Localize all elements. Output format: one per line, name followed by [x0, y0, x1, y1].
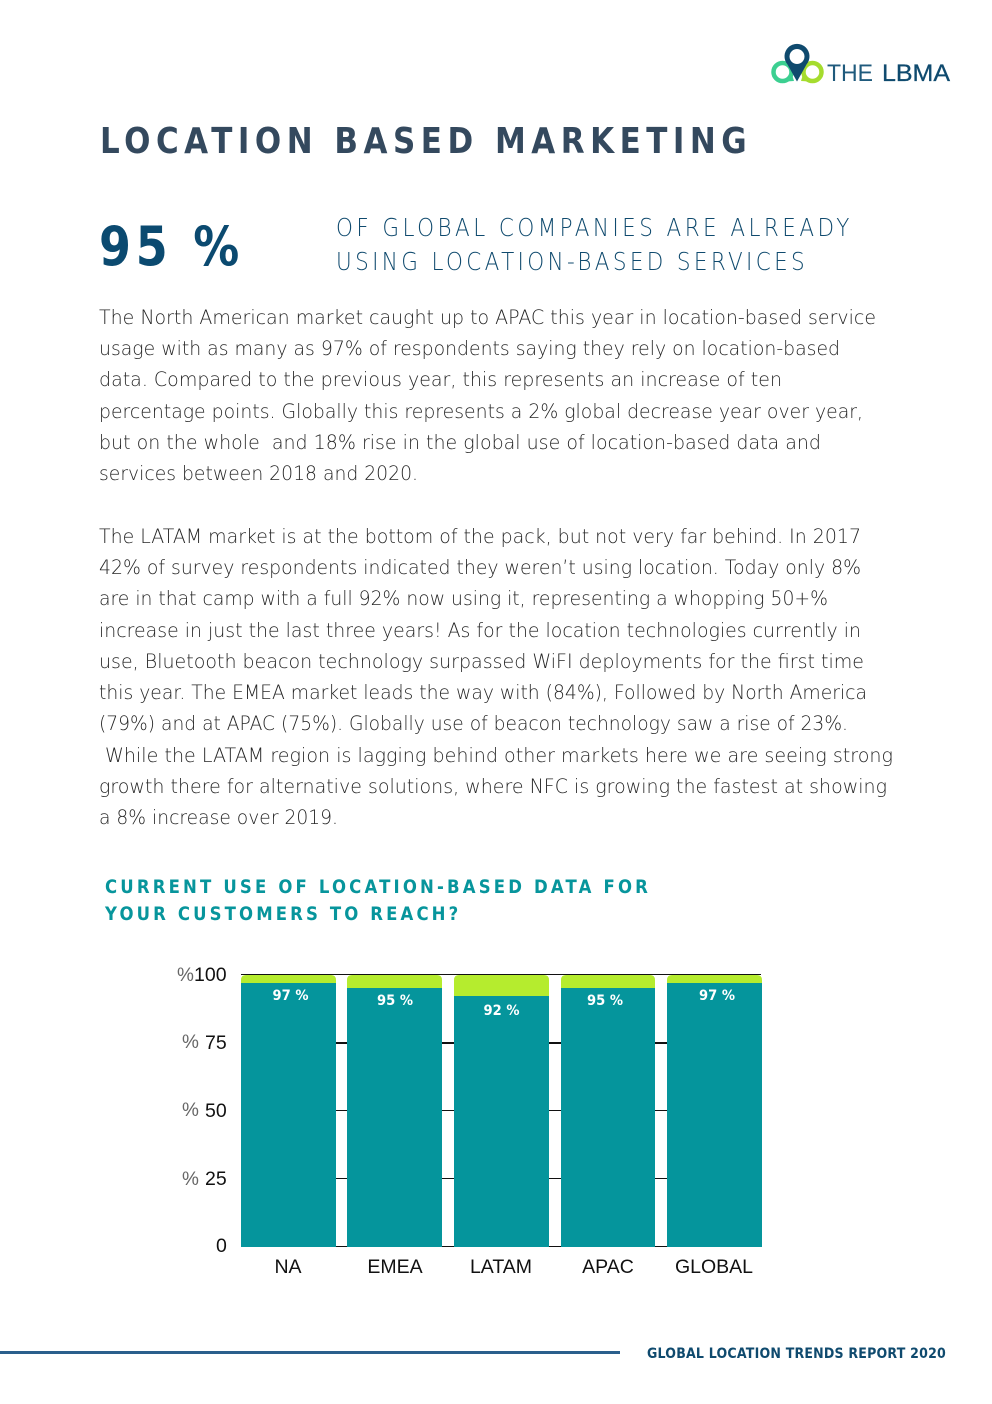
y axis labels: % [182, 1032, 199, 1053]
bar: NA [241, 975, 336, 1247]
x axis labels: APAC [582, 1256, 634, 1278]
stat caption: USING LOCATION-BASED SERVICES [336, 247, 805, 276]
y axis labels: % [177, 965, 194, 986]
x axis labels: GLOBAL [675, 1256, 753, 1278]
paragraph: LATAM market: 42% of survey respondents indicated they weren’t using location. Today only 8% [99, 556, 861, 579]
y axis labels [177, 964, 227, 1257]
paragraph: LATAM market: a 8% increase over 2019. [99, 806, 338, 829]
paragraph: LATAM market: this year. The EMEA market leads the way with (84%), Followed by North America [99, 681, 867, 704]
logo wordmark [827, 60, 950, 87]
logo: The LBMA [774, 44, 950, 87]
stat caption [336, 213, 849, 276]
bar: NA: 97 % [272, 988, 308, 1004]
paragraph: LATAM market [99, 525, 893, 829]
icon: lime ring pin [801, 63, 822, 82]
x axis labels: NA [274, 1256, 302, 1278]
logo wordmark: THE [827, 60, 873, 87]
paragraph: North American market: data. Compared to the previous year, this represents an increase of ten [99, 368, 782, 391]
footer text: GLOBAL LOCATION TRENDS REPORT 2020 [647, 1346, 946, 1362]
icon: navy location pin [784, 44, 809, 82]
paragraph: North American market: percentage points. Globally this represents a 2% global decrease year over year, [99, 400, 863, 423]
paragraph: North American market: usage with as many as 97% of respondents saying they rely on location-based [99, 337, 840, 360]
bar: GLOBAL [667, 975, 762, 1247]
paragraph: North American market [99, 306, 876, 485]
y axis labels: % [182, 1100, 199, 1121]
paragraph: North American market: The North American market caught up to APAC this year in location-based service [99, 306, 876, 329]
x axis labels: EMEA [367, 1256, 423, 1278]
y axis labels: 25 [205, 1168, 227, 1190]
bar: LATAM [454, 975, 549, 1247]
y axis labels: 100 [194, 964, 227, 986]
y axis labels: 75 [205, 1032, 227, 1054]
bar: GLOBAL: 97 % [699, 988, 735, 1004]
bar: EMEA [347, 975, 442, 1247]
bar: EMEA: 95 % [377, 993, 413, 1009]
bar chart [177, 964, 762, 1278]
paragraph: LATAM market: are in that camp with a full 92% now using it, representing a whopping 50+% [99, 587, 828, 610]
stat caption: OF GLOBAL COMPANIES ARE ALREADY [336, 213, 849, 242]
y axis labels: 0 [216, 1235, 227, 1257]
bar: APAC: 95 % [587, 993, 623, 1009]
title: LOCATION BASED MARKETING [100, 120, 747, 162]
x axis labels: LATAM [470, 1256, 532, 1278]
icon: green ring pin [774, 63, 794, 82]
big stat: 95 %: 95 % [99, 214, 239, 278]
paragraph: North American market: but on the whole and 18% rise in the global use of location-based data and [99, 431, 821, 454]
paragraph: LATAM market: increase in just the last three years! As for the location technologies currently in [99, 619, 861, 642]
footer rule [0, 1351, 620, 1354]
bar: LATAM: 92 % [484, 1003, 520, 1019]
paragraph: LATAM market: growth there for alternative solutions, where NFC is growing the fastest at showing [99, 775, 887, 798]
chart heading: YOUR CUSTOMERS TO REACH? [104, 903, 458, 925]
y axis labels: 50 [205, 1100, 227, 1122]
paragraph: North American market: services between 2018 and 2020. [99, 462, 418, 485]
logo wordmark: LBMA [882, 60, 950, 87]
y axis labels: % [182, 1169, 199, 1190]
chart heading: CURRENT USE OF LOCATION-BASED DATA FOR [105, 876, 648, 898]
x axis labels [274, 1256, 753, 1278]
paragraph: LATAM market: While the LATAM region is lagging behind other markets here we are seeing strong [105, 744, 893, 767]
paragraph: LATAM market: (79%) and at APAC (75%). Globally use of beacon technology saw a rise of 23%. [99, 712, 848, 735]
bar: APAC [561, 975, 655, 1247]
paragraph: LATAM market: The LATAM market is at the bottom of the pack, but not very far behind. In 2017 [99, 525, 861, 548]
paragraph: LATAM market: use, Bluetooth beacon technology surpassed WiFI deployments for the first time [99, 650, 864, 673]
chart heading [104, 876, 648, 925]
